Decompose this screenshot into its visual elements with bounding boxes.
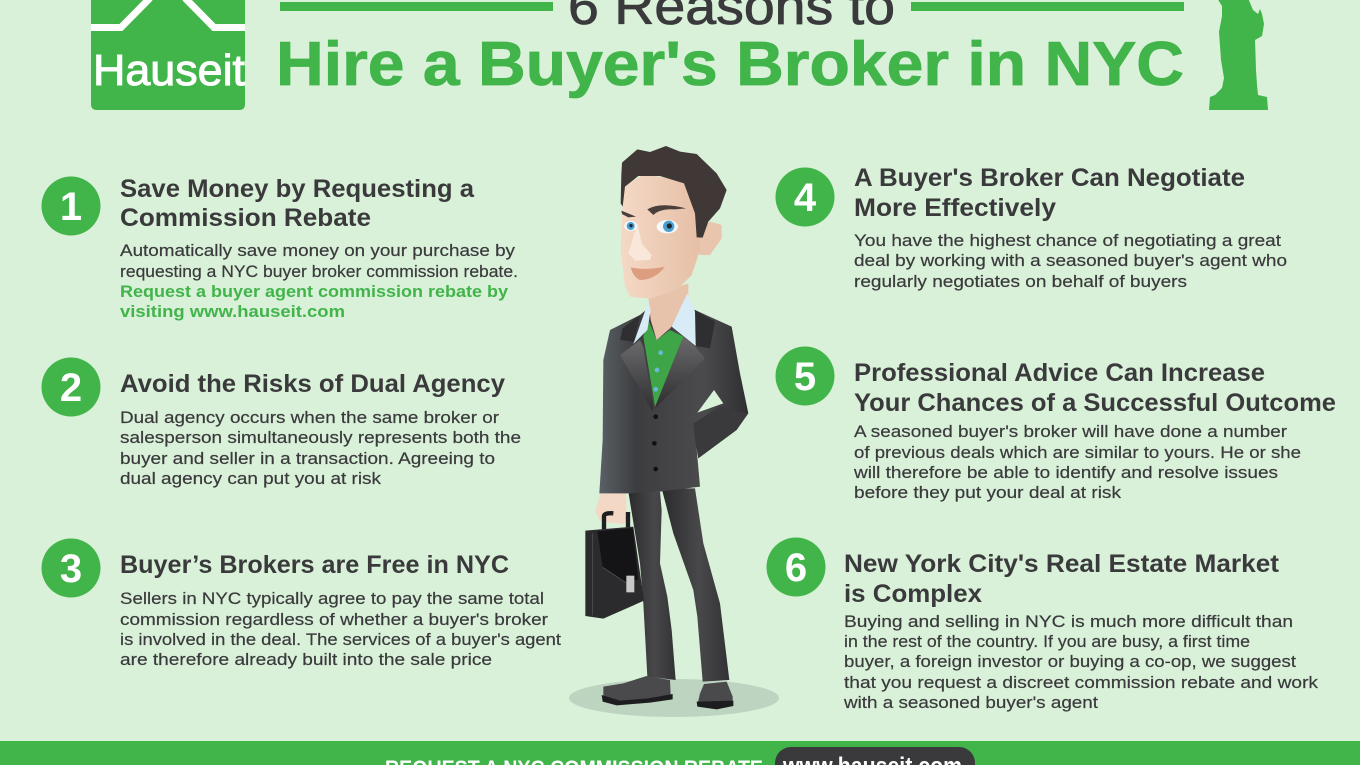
logo: Hauseit: Hauseit: [93, 46, 245, 95]
collar: [633, 302, 651, 344]
briefcase: [585, 527, 644, 619]
reason 2: Dual agency occurs when the same broker or: [120, 408, 499, 427]
reason 1: Save Money by Requesting a: [120, 175, 475, 203]
reason 5: A seasoned buyer's broker will have done a number: [854, 422, 1287, 441]
reason 2: dual agency can put you at risk: [120, 469, 382, 488]
hand: [595, 493, 627, 524]
reason 6: Buying and selling in NYC is much more difficult than: [844, 612, 1293, 631]
reason 4: More Effectively: [854, 194, 1056, 222]
reason 5: 5: [794, 355, 816, 399]
reason 2: 2: [60, 366, 82, 410]
logo: Hauseit: [91, 0, 245, 110]
jacket sleeve: [693, 407, 748, 458]
reason 3: is involved in the deal. The services of a buyer's agent: [120, 630, 561, 649]
reason 5: of previous deals which are similar to yours. He or she: [854, 443, 1301, 462]
eyes: [657, 220, 678, 233]
nose: [628, 223, 652, 261]
lapels: [620, 340, 653, 412]
reason 3: [42, 538, 561, 669]
reason 5: before they put your deal at risk: [854, 483, 1122, 502]
reason 4: deal by working with a seasoned buyer's agent who: [854, 251, 1287, 270]
reason 3: are therefore already built into the sale price: [120, 650, 492, 669]
reason 6: is Complex: [844, 580, 982, 608]
reason 5: [776, 346, 1336, 502]
reason 3: 3: [60, 547, 82, 591]
title: Hire a Buyer's Broker in NYC: [276, 30, 1184, 99]
ground shadow: [569, 679, 779, 717]
reason 5: Professional Advice Can Increase: [854, 359, 1265, 387]
shirt buttons: [658, 350, 663, 355]
footer banner: [0, 741, 1360, 765]
reason 3: commission regardless of whether a buyer's broker: [120, 610, 548, 629]
eyebrows: [647, 205, 686, 215]
jacket buttons: [653, 414, 658, 419]
reason 2: [42, 358, 521, 488]
reason 1: Request a buyer agent commission rebate by: [120, 282, 509, 301]
reason 1: requesting a NYC buyer broker commission rebate.: [120, 262, 518, 281]
neck: [648, 283, 688, 340]
right shoe: [697, 682, 733, 705]
briefcase handle: [604, 512, 628, 529]
reason 5: will therefore be able to identify and resolve issues: [853, 463, 1278, 482]
reason 1: Automatically save money on your purchase by: [120, 241, 516, 260]
reason 1: 1: [60, 185, 82, 229]
reason 6: in the rest of the country. If you are busy, a first time: [844, 632, 1250, 651]
shirt: [643, 320, 683, 407]
jacket: [599, 146, 748, 493]
mouth: [631, 267, 665, 280]
reason 1: Commission Rebate: [120, 204, 371, 232]
reason 4: [776, 164, 1287, 291]
icon: Statue of Liberty: [1209, 0, 1268, 110]
reason 1: [42, 175, 518, 321]
reason 6: [766, 538, 1319, 712]
reason 5: Your Chances of a Successful Outcome: [854, 389, 1336, 417]
left shoe: [603, 676, 671, 704]
legs: [585, 488, 733, 709]
reason 2: salesperson simultaneously represents both the: [120, 428, 521, 447]
gap between arm and body: [697, 390, 723, 413]
ear: [698, 222, 722, 255]
reason 2: Avoid the Risks of Dual Agency: [120, 370, 505, 398]
face: [621, 175, 700, 299]
reason 4: regularly negotiates on behalf of buyers: [854, 272, 1187, 291]
reason 4: 4: [794, 176, 817, 220]
reason 6: with a seasoned buyer's agent: [843, 693, 1098, 712]
reason 4: A Buyer's Broker Can Negotiate: [854, 164, 1245, 192]
reason 6: New York City's Real Estate Market: [844, 550, 1280, 578]
reason 6: buyer, a foreign investor or buying a co-op, we suggest: [844, 652, 1296, 671]
title: [276, 0, 1184, 99]
reason 4: You have the highest chance of negotiating a great: [854, 231, 1281, 250]
reason 6: 6: [785, 546, 807, 590]
reason 1: visiting www.hauseit.com: [120, 302, 345, 321]
hair: [621, 146, 727, 238]
reason 2: buyer and seller in a transaction. Agreeing to: [120, 449, 495, 468]
reason 6: that you request a discreet commission rebate and work: [844, 673, 1319, 692]
reason 3: Buyer’s Brokers are Free in NYC: [120, 551, 509, 579]
illustration: businessman with briefcase: [569, 146, 779, 717]
reason 3: Sellers in NYC typically agree to pay the same total: [120, 589, 544, 608]
